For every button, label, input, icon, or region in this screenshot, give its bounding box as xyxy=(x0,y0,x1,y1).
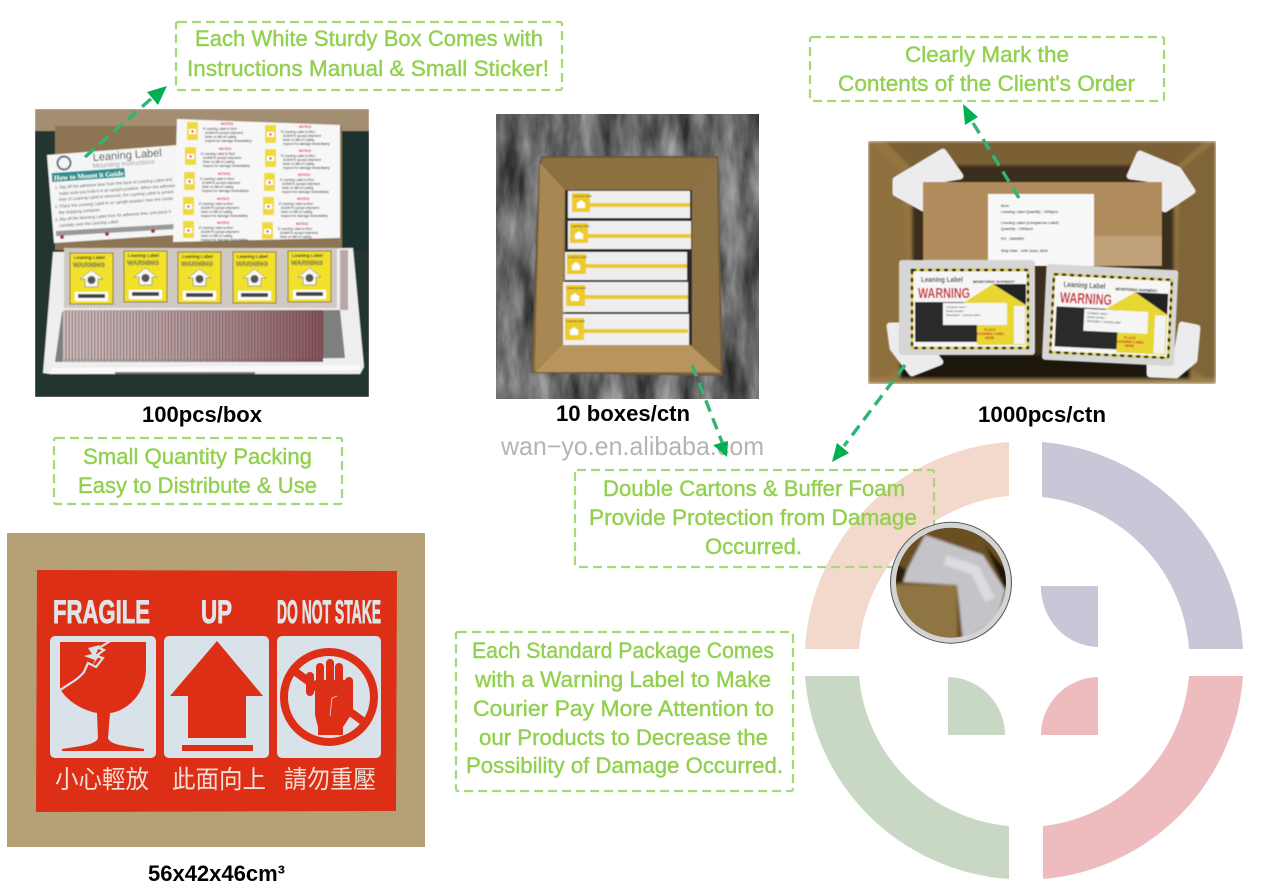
sticker sheet: If Leaning Label is Red: xyxy=(199,202,234,206)
sticker sheet: NOTICE xyxy=(219,147,232,151)
warning pack: left: MONITORED SHIPMENT xyxy=(973,280,1016,284)
carton walls xyxy=(532,157,722,375)
five warning labels: WARNING xyxy=(127,260,159,267)
chinese caption: do not press: 請勿重壓 xyxy=(284,760,376,796)
stacked labels xyxy=(63,310,323,362)
sticker sheet: Note on Bill of Lading xyxy=(201,234,233,238)
magnifier: foam corner detail xyxy=(890,520,1012,645)
sticker sheet: If Leaning Label is Red: xyxy=(281,154,316,158)
icon: up arrow xyxy=(164,636,269,758)
sticker sheet: Inspect for damage immediately xyxy=(202,189,249,193)
caption: carton dimensions: 56x42x46cm³ xyxy=(148,861,285,886)
arrow: to double cartons from foam xyxy=(832,365,905,462)
concrete background xyxy=(496,114,759,399)
callout: small quantity packing: Small Quantity Packing xyxy=(83,444,312,469)
sticker sheet: ALWAYS accept shipment xyxy=(201,230,239,234)
sticker sheet: ALWAYS accept shipment xyxy=(283,134,321,138)
five warning labels: WARNING xyxy=(236,261,268,268)
five white boxes with yellow tape: Leaning Label xyxy=(568,255,587,259)
arrow: to white box callout xyxy=(85,86,167,157)
paper contents sheet: Leaning Label (Companion Label) xyxy=(1001,221,1060,225)
sticker sheet: ALWAYS accept shipment xyxy=(280,231,318,235)
sticker sheet: NOTICE xyxy=(221,122,234,126)
paper contents sheet: Leaning Label Quantity : 1000pcs xyxy=(1001,210,1058,214)
sticker sheet: If Leaning Label is Red: xyxy=(278,227,313,231)
instruction manual sheet: 3. Rip off the Warning Label from its adhesive liner and place it xyxy=(55,209,172,222)
sticker sheet: If Leaning Label is Red: xyxy=(281,130,316,134)
five warning labels: Leaning Label xyxy=(182,254,213,259)
callout: warning label: Courier Pay More Attention to xyxy=(473,696,774,721)
five white boxes with yellow tape: Leaning Label xyxy=(571,224,590,228)
sticker sheet: ALWAYS accept shipment xyxy=(203,156,241,160)
sticker sheet: If Leaning Label is Red: xyxy=(279,202,314,206)
warning pack: left: PLACE xyxy=(984,328,996,332)
sticker sheet: Note on Bill of Lading xyxy=(280,235,312,239)
paper contents sheet: PO : 19/00557 xyxy=(1001,237,1024,241)
callout: warning label: with a Warning Label to Make xyxy=(474,667,771,692)
caption: 10 boxes/ctn: 10 boxes/ctn xyxy=(556,401,690,426)
sticker sheet: Inspect for damage immediately xyxy=(203,164,250,168)
callout: warning label xyxy=(456,632,793,791)
warning pack: left: Serial number : xyxy=(946,309,965,313)
sticker sheet: NOTICE xyxy=(218,172,231,176)
warning pack: left xyxy=(899,260,1035,355)
logo inner quadrant: green xyxy=(948,677,1005,735)
instruction manual sheet xyxy=(47,145,179,243)
sticker sheet: NOTICE xyxy=(217,221,230,225)
arrow: to mark contents callout xyxy=(963,104,1019,198)
photo: 10 boxes in carton xyxy=(496,114,759,399)
five warning labels: Leaning Label xyxy=(128,253,159,258)
instruction manual sheet: carefully over the Leaning Label. xyxy=(59,219,119,228)
instruction manual sheet: make sure you hold it in an upright position. When the adhesive xyxy=(59,183,177,196)
five white boxes with yellow tape xyxy=(563,191,691,345)
warning pack: right: HERE xyxy=(1125,344,1135,348)
caption: 1000pcs/ctn: 1000pcs/ctn xyxy=(978,402,1106,427)
sticker sheet: Note on Bill of Lading xyxy=(202,185,234,189)
warning pack: left: WARNING xyxy=(918,285,970,302)
warning pack: right: LEANING LABEL xyxy=(1117,339,1144,345)
logo arc: peach xyxy=(805,442,1009,649)
callout: double cartons: Provide Protection from Damage xyxy=(589,505,917,530)
chinese caption: handle with care: 小心輕放 xyxy=(55,760,149,796)
sticker sheet: ALWAYS accept shipment xyxy=(205,131,243,135)
heading: FRAGILE: FRAGILE xyxy=(53,594,150,630)
callout: white sturdy box xyxy=(176,22,562,90)
callout: double cartons: Occurred. xyxy=(705,534,802,559)
callout: white sturdy box: Each White Sturdy Box Comes with xyxy=(195,26,543,51)
instruction manual sheet: 1. Rip off the adhesive liner from the back of Leaning Label and xyxy=(55,177,173,190)
sticker sheet: ALWAYS accept shipment xyxy=(283,158,321,162)
sticker sheet: NOTICE xyxy=(298,173,311,177)
sticker sheet: Note on Bill of Lading xyxy=(205,135,237,139)
icon: broken glass xyxy=(50,636,156,758)
callout: small quantity packing: Easy to Distribute & Use xyxy=(78,473,317,498)
callout: warning label: Each Standard Package Comes xyxy=(472,638,774,663)
logo inner quadrant: pink xyxy=(1041,677,1098,735)
sticker sheet: If Leaning Label is Red: xyxy=(201,152,236,156)
warning pack: left: Company name : xyxy=(946,305,968,309)
logo watermark: four-colour target xyxy=(805,442,1243,879)
warning pack: left: Description : Leaning Label xyxy=(946,313,980,317)
photo: 1000pcs in carton xyxy=(868,141,1216,384)
sticker sheet: ALWAYS accept shipment xyxy=(281,206,319,210)
callout: mark contents: Contents of the Client's Order xyxy=(838,71,1135,96)
sticker sheet: NOTICE xyxy=(296,222,309,226)
red label xyxy=(36,570,397,812)
warning pack: left: HERE xyxy=(985,336,995,340)
sticker sheet: If Leaning Label is Red: xyxy=(199,226,234,230)
chinese caption: this side up: 此面向上 xyxy=(172,760,266,796)
caption: 100pcs/box: 100pcs/box xyxy=(142,402,263,427)
sticker sheet: Inspect for damage immediately xyxy=(283,166,330,170)
red label: DO NOT STAKE xyxy=(277,594,381,630)
warning pack: right: Company name : xyxy=(1087,311,1109,316)
sticker sheet: Inspect for damage immediately xyxy=(205,139,252,143)
warning pack: right xyxy=(1042,264,1178,366)
sticker sheet: ALWAYS accept shipment xyxy=(201,206,239,210)
five warning labels: Leaning Label xyxy=(74,255,105,260)
instruction manual sheet: the shipping container. xyxy=(59,207,101,215)
five warning labels: WARNING xyxy=(181,261,213,268)
five white boxes with yellow tape: Leaning Label xyxy=(573,194,592,198)
sticker sheet: NOTICE xyxy=(217,197,230,201)
sticker sheet: If Leaning Label is Red: xyxy=(280,178,315,182)
callout: warning label: Possibility of Damage Occurred. xyxy=(466,753,783,778)
logo arc: pink xyxy=(1043,676,1243,879)
five warning labels xyxy=(64,248,337,308)
warning pack: left: LEANING LABEL xyxy=(977,332,1005,336)
instruction manual sheet: 2. Place the Leaning Label in an upright position near the center of xyxy=(55,195,179,209)
sticker sheet: If Leaning Label is Red: xyxy=(200,177,235,181)
warning pack: right: Description : Leaning Label xyxy=(1087,319,1121,325)
instruction manual sheet: liner of Leaning Label is removed, the Leaning Label is armed. xyxy=(59,189,174,202)
paper contents sheet: Item: xyxy=(1001,204,1010,208)
paper contents sheet: Ship Date : 10th June, 2019 xyxy=(1001,249,1048,253)
five warning labels: WARNING xyxy=(291,260,323,267)
sticker sheet: Inspect for damage immediately xyxy=(201,238,248,242)
sticker sheet xyxy=(173,119,340,242)
five warning labels: WARNING xyxy=(73,262,105,269)
warning pack: right: MONITORED SHIPMENT xyxy=(1115,287,1158,293)
sticker sheet: Note on Bill of Lading xyxy=(281,210,313,214)
sticker sheet: ALWAYS accept shipment xyxy=(202,181,240,185)
sticker sheet: NOTICE xyxy=(299,125,312,129)
instruction manual sheet: Leaning Label xyxy=(92,147,162,164)
callout: small quantity packing xyxy=(54,438,342,504)
instruction manual sheet: Mounting Instructions xyxy=(93,159,156,170)
sticker sheet: NOTICE xyxy=(299,149,312,153)
sticker sheet: ALWAYS accept shipment xyxy=(282,182,320,186)
photo: carton with red fragile label xyxy=(7,533,425,847)
sticker sheet: Note on Bill of Lading xyxy=(282,186,314,190)
foam corners xyxy=(890,152,1197,375)
arrow: to double cartons from 10 boxes xyxy=(692,365,728,457)
logo arc: purple xyxy=(1042,442,1243,649)
callout: double cartons xyxy=(575,470,934,567)
warning pack: right: PLACE xyxy=(1124,336,1136,340)
paper contents sheet xyxy=(988,194,1094,266)
callout: white sturdy box: Instructions Manual & Small Sticker! xyxy=(187,56,549,81)
sticker sheet: NOTICE xyxy=(297,197,310,201)
callout: double cartons: Double Cartons & Buffer Foam xyxy=(603,476,905,501)
paper contents sheet: Quantity : 1000pcs xyxy=(1001,227,1033,231)
sticker sheet: Inspect for damage immediately xyxy=(283,142,330,146)
watermark text: wan−yo.en.alibaba.com xyxy=(500,431,764,461)
sticker sheet: If Leaning Label is Red: xyxy=(203,127,238,131)
five warning labels: Leaning Label xyxy=(237,254,268,259)
sticker sheet: Note on Bill of Lading xyxy=(283,138,315,142)
five white boxes with yellow tape: Leaning Label xyxy=(566,319,585,323)
inner cardboard box xyxy=(923,182,1162,266)
photo: 100pcs box with manual and stickers xyxy=(35,109,369,397)
callout: mark contents: Clearly Mark the xyxy=(905,42,1069,67)
sticker sheet: Inspect for damage immediately xyxy=(281,214,328,218)
callout: mark contents xyxy=(810,37,1164,101)
warning pack: right: WARNING xyxy=(1060,290,1112,309)
sticker sheet: Note on Bill of Lading xyxy=(203,160,235,164)
sticker sheet: Note on Bill of Lading xyxy=(201,210,233,214)
warning pack: right: Leaning Label xyxy=(1063,280,1106,291)
callout: warning label: our Products to Decrease the xyxy=(479,725,768,750)
logo inner quadrant: purple xyxy=(1041,586,1098,647)
five warning labels: Leaning Label xyxy=(292,253,323,258)
instruction manual sheet: How to Mount it Guide xyxy=(54,170,124,182)
white box xyxy=(43,248,364,374)
heading: UP: UP xyxy=(201,594,232,630)
warning pack: right: Serial number : xyxy=(1087,315,1106,320)
sticker sheet: Inspect for damage immediately xyxy=(282,190,329,194)
sticker sheet: Note on Bill of Lading xyxy=(283,162,315,166)
warning pack: left: Leaning Label xyxy=(921,275,963,284)
sticker sheet: Inspect for damage immediately xyxy=(201,214,248,218)
five white boxes with yellow tape: Leaning Label xyxy=(567,286,586,290)
logo arc: green xyxy=(805,676,1009,879)
icon: do not stack hand xyxy=(277,636,381,758)
